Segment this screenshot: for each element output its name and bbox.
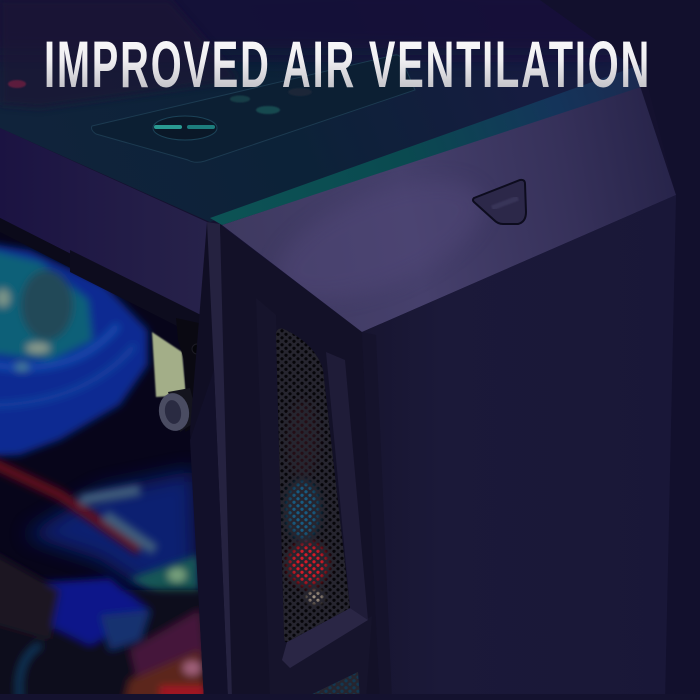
- thumbscrew: [156, 388, 198, 433]
- bracket: [152, 332, 186, 397]
- small screw: [192, 344, 202, 354]
- left dark top section: [0, 0, 240, 108]
- red fan glow: [288, 542, 328, 586]
- bezel facet: [256, 298, 372, 700]
- window frame: [0, 218, 207, 340]
- fan glow: [0, 240, 148, 458]
- bracket mount: [176, 318, 208, 432]
- bottom edge band: [0, 694, 700, 700]
- expansion bracket and thumbscrew: [152, 318, 208, 433]
- power button: [153, 116, 217, 140]
- top-right dark corner: [540, 0, 700, 700]
- motherboard: [0, 556, 204, 694]
- control panel plate: [92, 55, 415, 162]
- shadow above title: [0, 0, 620, 55]
- panel: lower bezel with vent: [220, 225, 380, 700]
- facet highlight right: [326, 352, 368, 620]
- panel: front top lit face: [222, 86, 676, 332]
- vent mesh: [276, 328, 350, 642]
- mesh pattern: [276, 328, 350, 642]
- panel: front face: [362, 195, 676, 700]
- control panel: [8, 55, 415, 162]
- panel: window interior: [0, 215, 215, 700]
- panel: side panel: [0, 128, 207, 323]
- graphics card: [25, 470, 198, 600]
- front inner edge: [362, 332, 392, 700]
- red indicator: [8, 80, 26, 88]
- icon: vent latch: [473, 180, 526, 224]
- dim red upper glow: [287, 400, 319, 480]
- white fan glow: [306, 590, 324, 604]
- blue fan glow: [286, 480, 320, 540]
- small buttons: [230, 88, 312, 114]
- facet highlight bottom: [282, 608, 368, 668]
- panel: case top: [0, 0, 650, 222]
- panel: front bezel strip: [190, 222, 240, 700]
- highlight on face: [286, 197, 467, 290]
- lower vent: [312, 672, 360, 694]
- teal edge strip: [210, 65, 644, 225]
